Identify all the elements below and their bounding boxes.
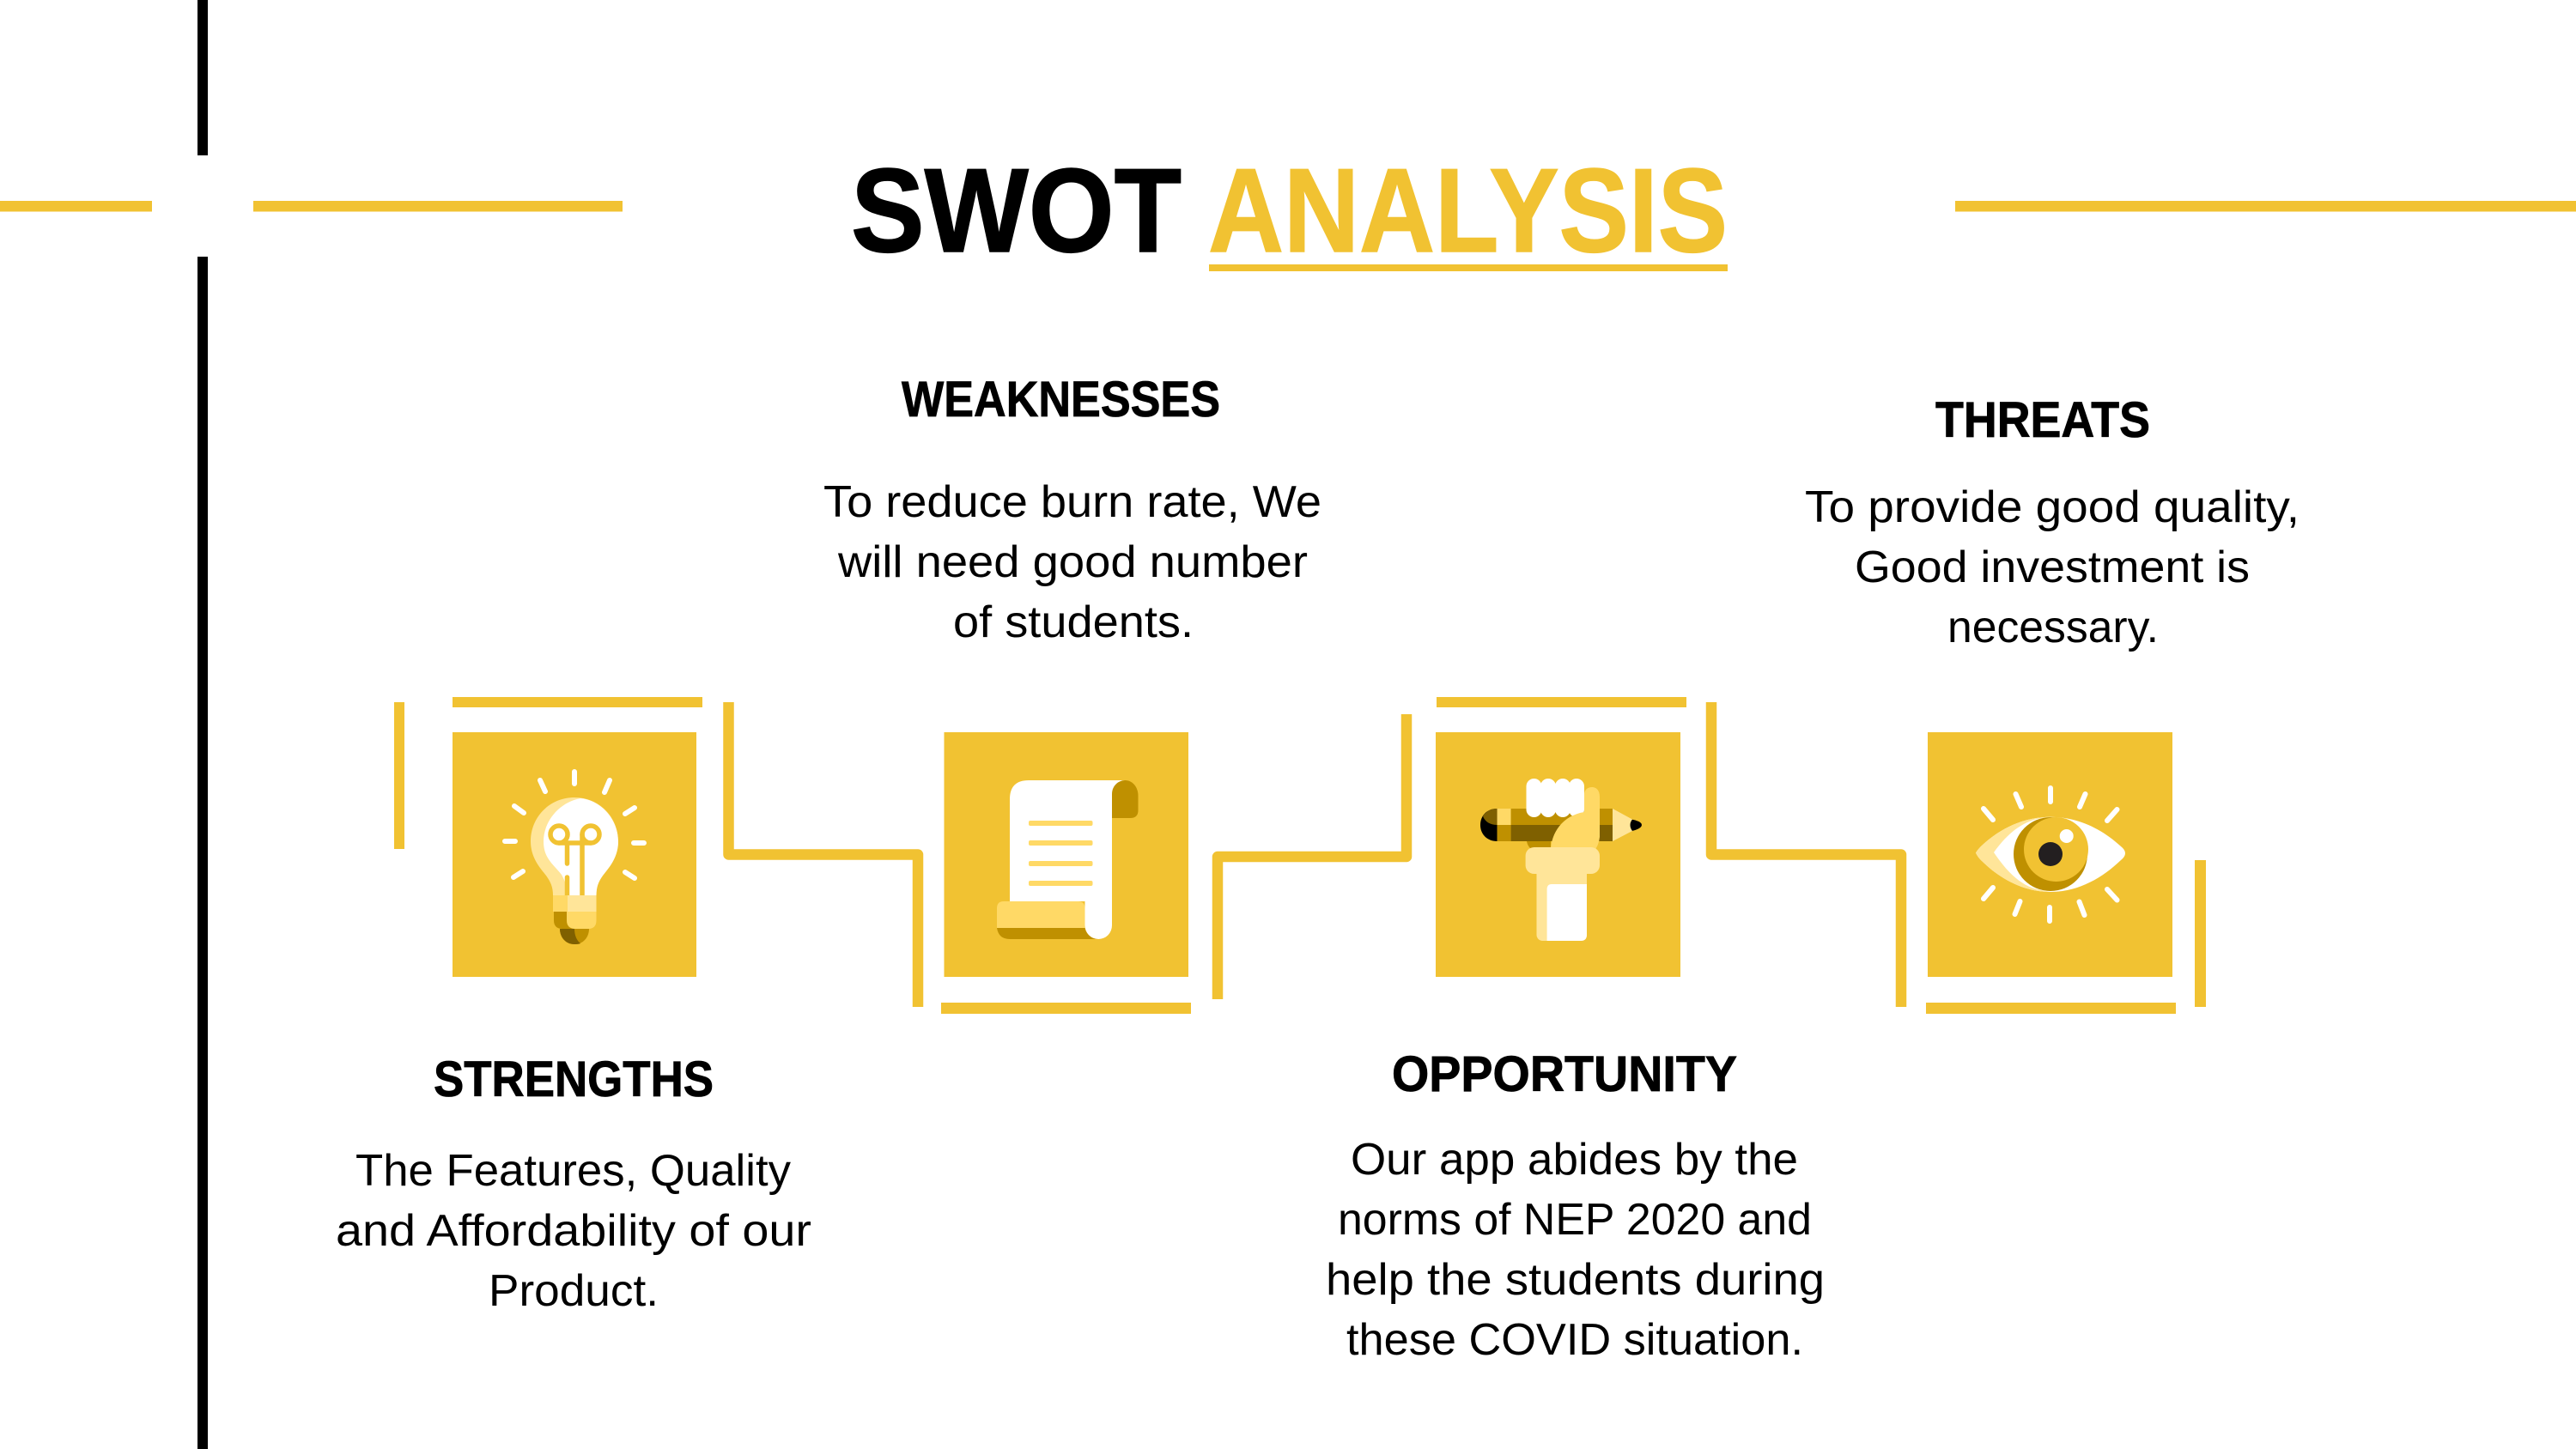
title: ANALYSIS [1208,144,1728,277]
title [851,144,1728,277]
panel: weaknesses text: will need good number [837,537,1308,586]
title: SWOT [851,144,1182,277]
icon card: hand with pencil [1436,697,1686,977]
panel: weaknesses text: of students. [953,597,1194,646]
panel: strengths text [336,1052,811,1315]
panel: opportunity text: these COVID situation. [1346,1314,1803,1364]
panel: threats text: necessary. [1947,602,2159,652]
icon card: scroll [941,732,1191,1014]
connector: opportunity to threats [1711,702,1901,1007]
panel: weaknesses text: To reduce burn rate, We [823,476,1321,526]
panel: weaknesses text [823,372,1321,646]
icon: paper scroll [997,780,1139,939]
panel: opportunity text: OPPORTUNITY [1392,1046,1737,1102]
icon: light bulb [505,772,644,944]
black vertical frame line [197,0,208,1449]
panel: opportunity text: norms of NEP 2020 and [1338,1194,1812,1244]
panel: strengths text: and Affordability of our [336,1205,811,1255]
icon card: light bulb [394,697,702,977]
panel: opportunity text: help the students during [1326,1254,1825,1304]
icon: eye [1976,788,2125,921]
icon card: eye [1926,732,2206,1014]
panel: opportunity text [1326,1046,1825,1364]
panel: weaknesses text: WEAKNESSES [902,372,1220,427]
panel: threats text [1805,392,2300,652]
icon: hand holding pencil [1480,779,1642,941]
panel: threats text: THREATS [1935,392,2150,448]
panel: strengths text: Product. [489,1265,659,1315]
connector: strengths to weaknesses [728,702,918,1007]
panel: opportunity text: Our app abides by the [1351,1134,1798,1184]
panel: threats text: To provide good quality, [1805,482,2300,531]
connector: weaknesses to opportunity [1218,714,1406,999]
panel: strengths text: The Features, Quality [355,1145,791,1195]
gold horizontal frame lines [0,201,2576,211]
panel: threats text: Good investment is [1855,542,2250,591]
panel: strengths text: STRENGTHS [434,1052,714,1107]
